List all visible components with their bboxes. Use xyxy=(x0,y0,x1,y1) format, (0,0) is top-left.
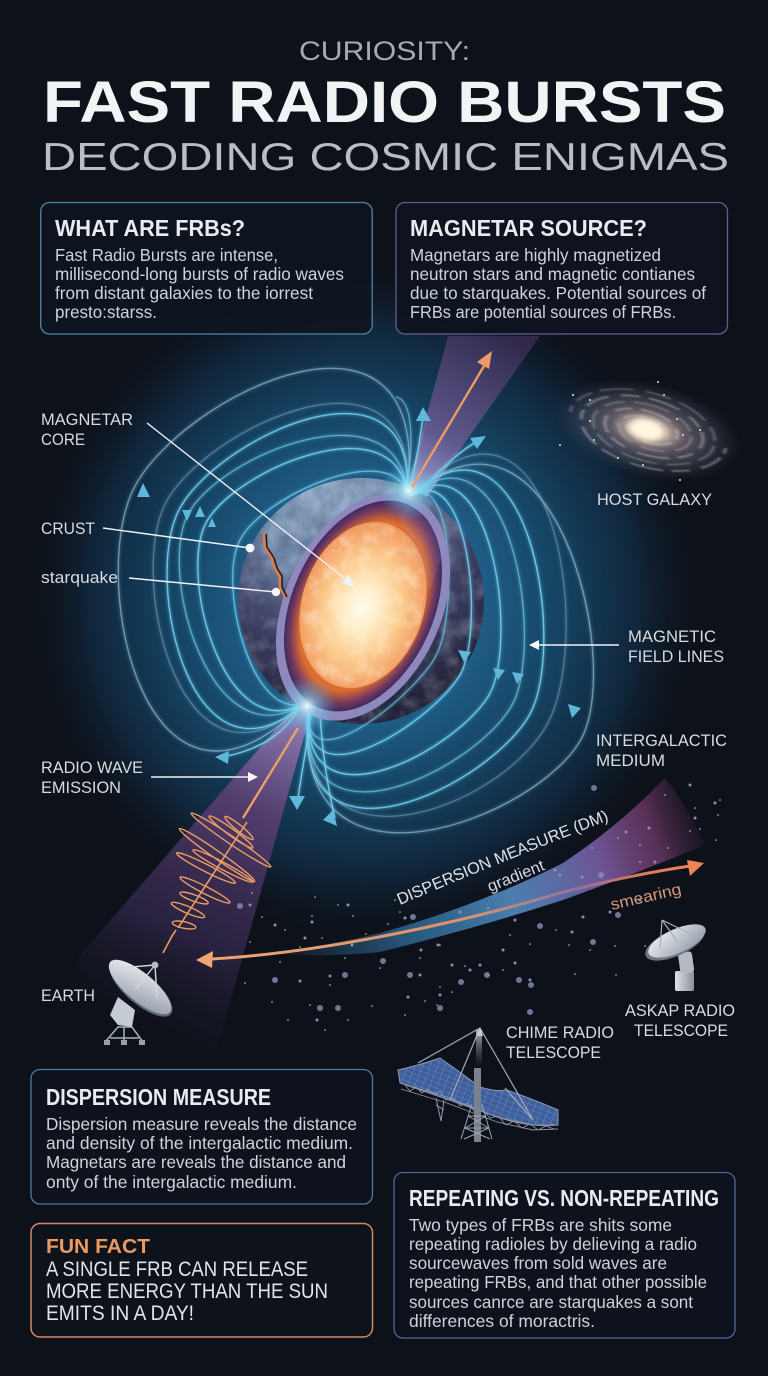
bottom beam line xyxy=(243,728,298,818)
panel body: neutron stars and magnetic contianes xyxy=(410,264,695,284)
arrow shaft xyxy=(212,866,690,959)
support truss xyxy=(400,1083,558,1130)
radio wave burst xyxy=(163,810,273,953)
askap radio dish xyxy=(640,917,710,991)
line xyxy=(536,644,619,646)
inner cyan field loops xyxy=(95,360,616,860)
chime radio telescope xyxy=(398,1027,558,1142)
neck xyxy=(678,951,694,974)
crack shadow xyxy=(266,534,287,597)
line xyxy=(151,776,250,778)
label: earth: EARTH xyxy=(41,986,95,1005)
line xyxy=(147,423,348,581)
south pole flare xyxy=(277,676,337,736)
galaxy halo xyxy=(544,362,752,498)
title: fast radio bursts: FAST RADIO BURSTS xyxy=(43,70,726,135)
panel body xyxy=(55,245,344,322)
panel heading: WHAT ARE FRBs? xyxy=(55,215,245,241)
leader: magnetar core xyxy=(147,423,354,587)
label: magnetic field lines xyxy=(628,627,724,666)
suspension cables xyxy=(418,1028,533,1120)
wave loops xyxy=(170,810,273,931)
feed mast tube xyxy=(476,1030,482,1068)
panel heading: MAGNETAR SOURCE? xyxy=(410,215,647,241)
light mottling xyxy=(238,478,484,724)
label: askap radio telescope: ASKAP RADIO xyxy=(625,1001,735,1020)
label: magnetar core: CORE xyxy=(41,430,85,449)
light wedge on shell xyxy=(398,503,446,590)
panel heading: DISPERSION MEASURE xyxy=(46,1084,271,1110)
magnetic field lines xyxy=(43,305,683,898)
label: radio wave emission: EMISSION xyxy=(41,778,121,797)
line xyxy=(129,578,276,592)
dispersion ray arrow xyxy=(196,860,704,968)
dish rim xyxy=(640,918,710,968)
field line arrowheads xyxy=(137,407,581,826)
arrow shaft xyxy=(412,366,484,487)
panel body: Magnetars are reveals the distance and xyxy=(46,1152,346,1172)
panel body: differences of moractris. xyxy=(409,1311,595,1331)
feed struts xyxy=(660,920,695,949)
left arrow head xyxy=(196,951,213,968)
cut outer shell xyxy=(242,465,484,749)
panel body: onty of the intergalactic medium. xyxy=(46,1172,297,1192)
panel body: MORE ENERGY THAN THE SUN xyxy=(46,1280,328,1303)
panel heading: FUN FACT xyxy=(46,1236,150,1258)
crack glow xyxy=(264,533,286,598)
arrow head xyxy=(529,640,539,650)
label: radio wave emission: RADIO WAVE xyxy=(41,758,143,777)
label: askap radio telescope xyxy=(625,1001,735,1040)
arrow head xyxy=(342,574,354,587)
label: intergalactic medium: MEDIUM xyxy=(596,751,665,770)
feed struts xyxy=(118,965,157,998)
bottom radio beam xyxy=(76,706,312,1060)
panel body: Dispersion measure reveals the distance xyxy=(46,1114,357,1134)
panel body xyxy=(46,1258,328,1325)
leader: magnetic field lines xyxy=(529,640,619,650)
leader: crust xyxy=(103,528,254,552)
dark mottling xyxy=(238,478,484,724)
north pole flare xyxy=(379,461,439,521)
left support xyxy=(436,1098,444,1121)
panel: what are frbs xyxy=(41,202,372,334)
label: starquake: starquake xyxy=(41,568,118,587)
panel frame xyxy=(394,1172,735,1338)
wave axis and tail xyxy=(163,822,247,953)
panel body: due to starquakes. Potential sources of xyxy=(410,283,706,303)
panel body: repeating radioles by delieving a radio xyxy=(409,1234,697,1254)
galaxy nucleus xyxy=(627,416,665,443)
title: decoding cosmic enigmas: DECODING COSMIC ENIGMAS xyxy=(42,136,729,179)
panel: fun fact xyxy=(31,1224,372,1337)
lattice tower xyxy=(461,1104,492,1139)
core texture xyxy=(281,508,445,702)
pedestal legs xyxy=(105,1027,143,1042)
panel body xyxy=(46,1114,357,1192)
panel body xyxy=(409,1215,707,1331)
cut cross-section of the magnetar xyxy=(242,465,484,749)
dispersion measure band xyxy=(270,778,705,955)
central pylon xyxy=(474,1068,481,1142)
label: magnetar core: MAGNETAR xyxy=(41,410,133,429)
gradient label: gradient xyxy=(485,857,548,896)
mantle layer xyxy=(253,476,473,736)
panel frame xyxy=(396,202,728,334)
outer pale field loops xyxy=(43,305,683,898)
top radio beam xyxy=(406,336,540,498)
label: chime radio telescope xyxy=(506,1023,614,1062)
panel body: Two types of FRBs are shits some xyxy=(409,1215,672,1235)
dot xyxy=(246,544,254,552)
panel body: repeating FRBs, and that other possible xyxy=(409,1272,707,1292)
label: intergalactic medium: INTERGALACTIC xyxy=(596,731,727,750)
panel body: and density of the intergalactic medium. xyxy=(46,1133,353,1153)
panel body: presto:starss. xyxy=(55,302,157,322)
panel body: from distant galaxies to the iorrest xyxy=(55,283,313,303)
apex xyxy=(477,1027,483,1036)
dish face xyxy=(644,917,710,965)
panel body: FRBs are potential sources of FRBs. xyxy=(410,302,676,322)
panel body: sources canrce are starquakes a sont xyxy=(409,1292,693,1312)
rock base xyxy=(238,478,484,724)
label: chime radio telescope: TELESCOPE xyxy=(506,1043,601,1062)
panel: repeating vs non-repeating xyxy=(394,1172,735,1338)
panel body xyxy=(410,245,706,322)
panel frame xyxy=(41,202,372,334)
leader: starquake xyxy=(129,578,280,596)
spiral arms xyxy=(562,376,734,484)
feed horn xyxy=(152,962,158,968)
reflector surface xyxy=(398,1058,558,1126)
label: chime radio telescope: CHIME RADIO xyxy=(506,1023,614,1042)
label: magnetic field lines: FIELD LINES xyxy=(628,647,724,666)
label: magnetar core xyxy=(41,410,133,449)
line xyxy=(103,528,250,548)
host galaxy illustration xyxy=(544,362,752,498)
panel body: Fast Radio Bursts are intense, xyxy=(55,245,278,265)
galaxy stars xyxy=(560,382,700,480)
label: intergalactic medium xyxy=(596,731,727,770)
earth radio dish xyxy=(101,951,181,1045)
panel body: sourcewaves from sold waves are xyxy=(409,1253,667,1273)
label: host galaxy: HOST GALAXY xyxy=(597,490,712,509)
open field lines at the poles xyxy=(222,397,480,818)
base cylinder xyxy=(675,971,694,991)
dispersion measure curved label: DISPERSION MEASURE (DM) xyxy=(396,810,608,904)
panel frame xyxy=(31,1224,372,1337)
label: radio wave emission xyxy=(41,758,143,797)
right arrow head xyxy=(687,860,704,876)
leader: radio wave emission xyxy=(151,772,258,782)
label: askap radio telescope: TELESCOPE xyxy=(634,1021,728,1040)
panel body: Magnetars are highly magnetized xyxy=(410,245,661,265)
panel body: EMITS IN A DAY! xyxy=(46,1302,194,1325)
panel body: A SINGLE FRB CAN RELEASE xyxy=(46,1258,308,1281)
intergalactic dust particles xyxy=(240,785,720,1030)
pedestal body xyxy=(110,997,135,1027)
panel: magnetar source xyxy=(396,202,728,334)
panel frame xyxy=(31,1070,372,1204)
title: curiosity: CURIOSITY: xyxy=(299,36,470,66)
title block xyxy=(42,36,729,179)
dot xyxy=(272,588,280,596)
dish rim shadow xyxy=(101,952,181,1026)
arrow head xyxy=(248,772,258,782)
neutron star crust sphere xyxy=(238,478,484,724)
starquake crack xyxy=(264,533,287,598)
arrow head xyxy=(477,351,492,369)
panel body: millisecond-long bursts of radio waves xyxy=(55,264,344,284)
label: magnetic field lines: MAGNETIC xyxy=(628,627,716,646)
smearing label: smearing xyxy=(609,881,683,914)
pedestal feet xyxy=(104,1040,145,1045)
glowing magnetar core xyxy=(279,505,447,705)
top beam arrow xyxy=(412,351,492,487)
panel: dispersion measure xyxy=(31,1070,372,1204)
label: crust: CRUST xyxy=(41,519,95,538)
background blue glow xyxy=(20,255,710,945)
dish face xyxy=(101,951,179,1023)
